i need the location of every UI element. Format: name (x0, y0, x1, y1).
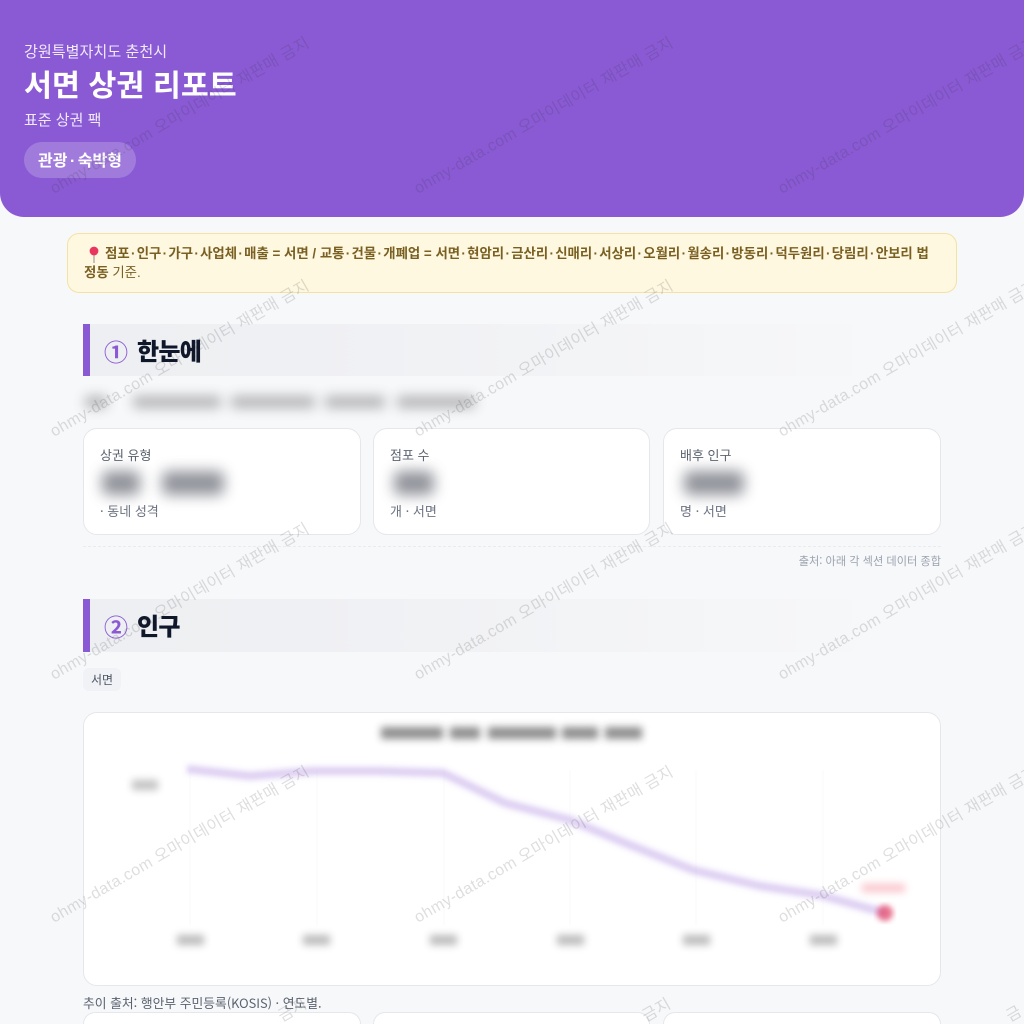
section heading: population (83, 599, 941, 652)
header banner (0, 0, 1024, 217)
watermark layer: ohmy-data.com 오마이데이터 재판매 금지 (47, 763, 313, 926)
watermark layer: ohmy-data.com 오마이데이터 재판매 금지 (47, 277, 313, 440)
lower card 1 (83, 1012, 361, 1024)
chart source caption: 추이 출처: 행안부 주민등록(KOSIS) · 연도별. (83, 993, 322, 1012)
section title: 인구 (137, 607, 180, 642)
blurred y-axis label (132, 780, 158, 790)
type badge: 관광·숙박형 (38, 153, 122, 170)
area chip: 서면 (91, 671, 113, 688)
blurred latest value label (862, 884, 905, 892)
population trend line (187, 769, 885, 913)
latest value marker (877, 905, 893, 921)
notice text line 1: 점포·인구·가구·사업체·매출 = 서면 / 교통·건물·개폐업 = 서면·현암리·금산리·신매리·서상리·오월리·월송리·방동리·덕두원리·당림리·안보리 법 (105, 246, 929, 261)
watermark layer: ohmy-data.com 오마이데이터 재판매 금지 (47, 34, 313, 197)
sub text: 개 · 서면 (390, 501, 437, 520)
source note: 출처: 아래 각 섹션 데이터 종합 (799, 553, 941, 569)
watermark layer: ohmy-data.com 오마이데이터 재판매 금지 (411, 520, 677, 683)
notice text line 2: 정동 기준. (84, 265, 141, 280)
KPI card: commercial type (83, 428, 361, 535)
type badge (24, 142, 136, 178)
section title: 한눈에 (137, 332, 201, 367)
watermark layer: ohmy-data.com 오마이데이터 재판매 금지 (411, 277, 677, 440)
subtitle: 표준 상권 팩 (24, 109, 101, 130)
lower card 3 (663, 1012, 941, 1024)
line chart (128, 722, 908, 950)
notice box (67, 233, 957, 293)
blurred value (102, 471, 140, 495)
label: 점포 수 (390, 445, 430, 464)
KPI card: population (663, 428, 941, 535)
blurred x-axis labels (177, 935, 837, 945)
sub text: · 동네 성격 (100, 501, 159, 520)
blurred value (394, 471, 434, 495)
icon: map pin (90, 246, 98, 263)
label: 배후 인구 (680, 445, 731, 464)
blurred value (684, 471, 744, 495)
section number: ① (104, 333, 128, 368)
sub text: 명 · 서면 (680, 501, 727, 520)
watermark layer: ohmy-data.com 오마이데이터 재판매 금지 (47, 520, 313, 683)
watermark layer: ohmy-data.com 오마이데이터 재판매 금지 (411, 763, 677, 926)
label: 상권 유형 (100, 445, 151, 464)
section heading: at a glance (83, 324, 941, 376)
lower card 2 (373, 1012, 650, 1024)
section number: ② (104, 608, 128, 643)
blurred chart title (381, 727, 642, 739)
line chart card (83, 712, 941, 986)
blurred summary sentence (80, 389, 480, 415)
region name: 강원특별자치도 춘천시 (24, 40, 167, 62)
title: 서면 상권 리포트 (24, 61, 237, 105)
area chip (83, 668, 121, 691)
watermark layer: ohmy-data.com 오마이데이터 재판매 금지 (411, 34, 677, 197)
KPI card: stores (373, 428, 650, 535)
